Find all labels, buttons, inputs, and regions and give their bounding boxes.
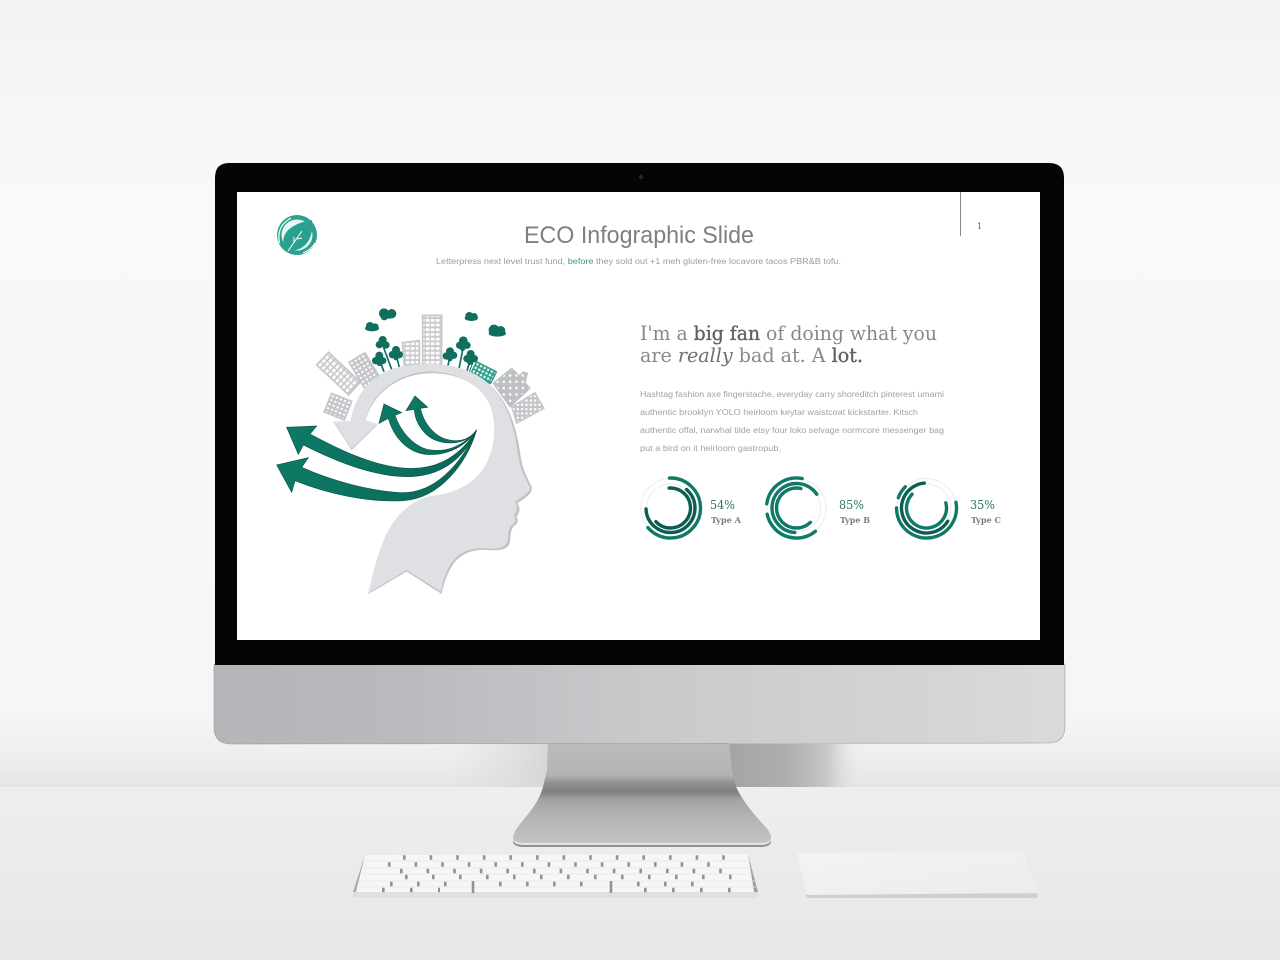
trackpad	[797, 852, 1038, 898]
monitor bezel	[215, 163, 1064, 665]
monitor stand	[513, 743, 771, 847]
ring chart: Type B	[754, 466, 839, 550]
arrow 1	[277, 430, 477, 501]
logo	[277, 215, 317, 255]
label: 85% Type B	[839, 498, 870, 525]
headline: are really bad at. A lot.	[640, 343, 863, 367]
page number: 1	[977, 222, 982, 231]
clouds	[365, 308, 506, 337]
headline	[640, 321, 937, 367]
buildings	[317, 315, 544, 423]
arrow 4	[406, 396, 477, 443]
headline: I'm a big fan of doing what you	[640, 321, 937, 345]
monitor	[214, 163, 1065, 744]
body paragraph	[640, 389, 944, 453]
body paragraph: Hashtag fashion axe fingerstache, everyday carry shoreditch pinterest umami	[640, 389, 944, 399]
label: 54% Type A	[710, 498, 742, 525]
arrow 2	[287, 426, 477, 477]
head illustration	[277, 308, 544, 594]
body paragraph: authentic offal, narwhal tilde etsy four loko selvage normcore messenger bag	[640, 425, 944, 435]
monitor chin	[214, 664, 1065, 744]
ring chart: Type A	[636, 473, 705, 543]
label: 85% Type B: 85%	[839, 498, 864, 512]
bus	[469, 362, 497, 384]
label: 35% Type C: 35%	[970, 498, 995, 512]
body paragraph: authentic brooklyn YOLO heirloom keytar waistcoat kickstarter. Kitsch	[640, 407, 918, 417]
arrow 3	[379, 404, 477, 455]
label: 85% Type B: Type B	[840, 515, 870, 525]
label: 54% Type A: Type A	[711, 515, 742, 525]
page number	[960, 192, 982, 236]
label: 54% Type A: 54%	[710, 498, 735, 512]
label: 35% Type C: Type C	[971, 515, 1001, 525]
webcam	[639, 175, 643, 179]
title: ECO Infographic Slide	[524, 222, 754, 249]
desk surface	[0, 787, 1280, 960]
trees	[372, 336, 478, 372]
ring chart: Type C	[888, 470, 965, 546]
stand shadow on wall	[488, 744, 847, 787]
label: 35% Type C	[970, 498, 1001, 525]
body paragraph: put a bird on it heirloom gastropub.	[640, 443, 781, 453]
screen	[237, 192, 1040, 640]
head silhouette	[333, 364, 532, 594]
keyboard	[353, 854, 758, 898]
subtitle: Letterpress next level trust fund, before they sold out +1 meh gluten-free locavore tacos PBR&B tofu.	[436, 256, 841, 266]
